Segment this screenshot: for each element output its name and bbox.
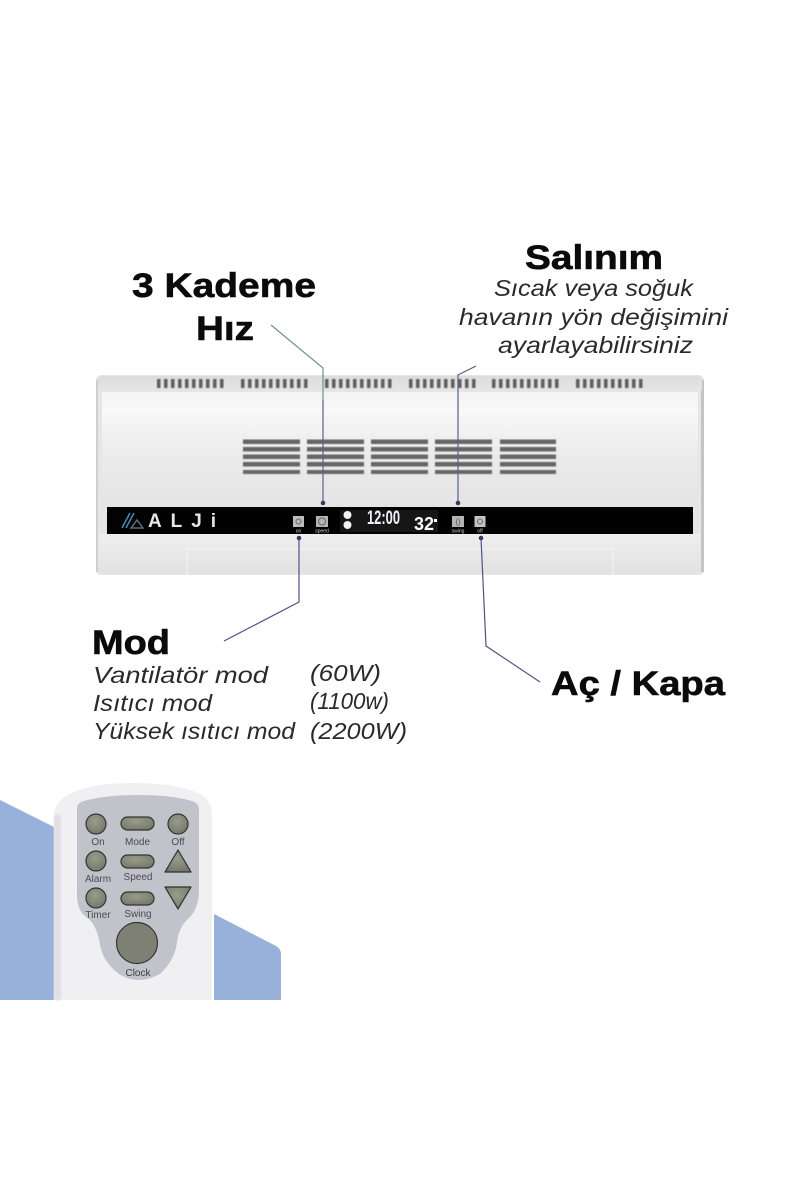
remote left shade	[54, 815, 61, 1000]
key: Clock: Clock	[125, 968, 151, 979]
background shape: blue left	[0, 800, 56, 1000]
logo: ALJi: ALJi	[148, 511, 216, 532]
button: speed	[315, 516, 329, 534]
key: Speed: Speed	[124, 872, 152, 883]
button: on: on	[296, 528, 301, 534]
key: Mode: Mode	[125, 837, 150, 848]
remote body	[54, 783, 212, 1000]
display panel: 32	[414, 514, 434, 534]
button: off	[474, 516, 486, 534]
background shape: blue right	[214, 914, 281, 1000]
text block: swing description	[459, 275, 729, 358]
key: up arrow	[165, 850, 191, 872]
text block: mode list: (1100w)	[310, 688, 389, 714]
key: On: On	[91, 837, 105, 848]
remote key panel	[77, 795, 199, 980]
key: Timer: Timer	[85, 910, 111, 921]
text block: swing description: Sıcak veya soğuk	[494, 275, 695, 301]
key: Off	[168, 814, 188, 848]
arrow: power leader line	[479, 536, 540, 682]
key: Swing	[121, 892, 154, 920]
heading: Aç / Kapa: Aç / Kapa	[551, 665, 726, 703]
arrow: swing leader line	[456, 366, 476, 505]
heading: Mod: Mod	[92, 624, 170, 662]
key: Speed	[121, 855, 154, 883]
lower face	[99, 534, 701, 573]
key: Mode	[121, 817, 154, 848]
control band	[107, 507, 693, 534]
key: Alarm: Alarm	[85, 874, 111, 885]
display panel	[340, 508, 438, 534]
left edge shade	[96, 380, 98, 572]
heading: 3 Kademe Hız	[132, 267, 316, 348]
button: swing: ()	[455, 518, 461, 526]
text block: mode list: Yüksek ısıtıcı mod	[93, 718, 296, 744]
front air grille	[243, 440, 556, 474]
text block: mode list	[93, 660, 407, 744]
button: swing: swing	[452, 528, 465, 534]
text block: mode list: (2200W)	[310, 718, 407, 744]
arrow: mode leader line	[224, 536, 301, 641]
top strip	[98, 376, 702, 392]
text block: mode list: Vantilatör mod	[93, 662, 269, 688]
text block: swing description: ayarlayabilirsiniz	[498, 332, 694, 358]
text block: mode list: (60W)	[310, 660, 381, 686]
right edge shade	[701, 380, 704, 572]
lower flap outline	[187, 549, 613, 574]
key: Off: Off	[171, 837, 185, 848]
front face	[102, 392, 698, 507]
heading: 3 Kademe Hız: Hız	[196, 310, 254, 348]
button: speed: speed	[315, 528, 329, 534]
panel: wall heater unit	[96, 375, 704, 575]
text block: mode list: Isıtıcı mod	[93, 690, 213, 716]
text block: swing description: havanın yön değişimini	[459, 304, 729, 330]
unit body	[96, 375, 704, 575]
key: Timer	[85, 888, 111, 921]
button: on	[293, 516, 304, 534]
button: swing	[452, 516, 465, 534]
display panel: 12:00	[367, 508, 400, 529]
button: off: off	[477, 528, 483, 534]
remote control	[54, 783, 212, 1000]
top vent slots	[157, 379, 642, 388]
arrow: speed leader line	[271, 325, 325, 505]
key: Clock	[116, 922, 158, 979]
key: Swing: Swing	[124, 909, 152, 920]
key: down arrow	[165, 887, 191, 909]
key: Alarm	[85, 851, 111, 885]
heading: 3 Kademe Hız: 3 Kademe	[132, 267, 316, 305]
heading: Salınım: Salınım	[525, 239, 663, 277]
key: On	[86, 814, 106, 848]
